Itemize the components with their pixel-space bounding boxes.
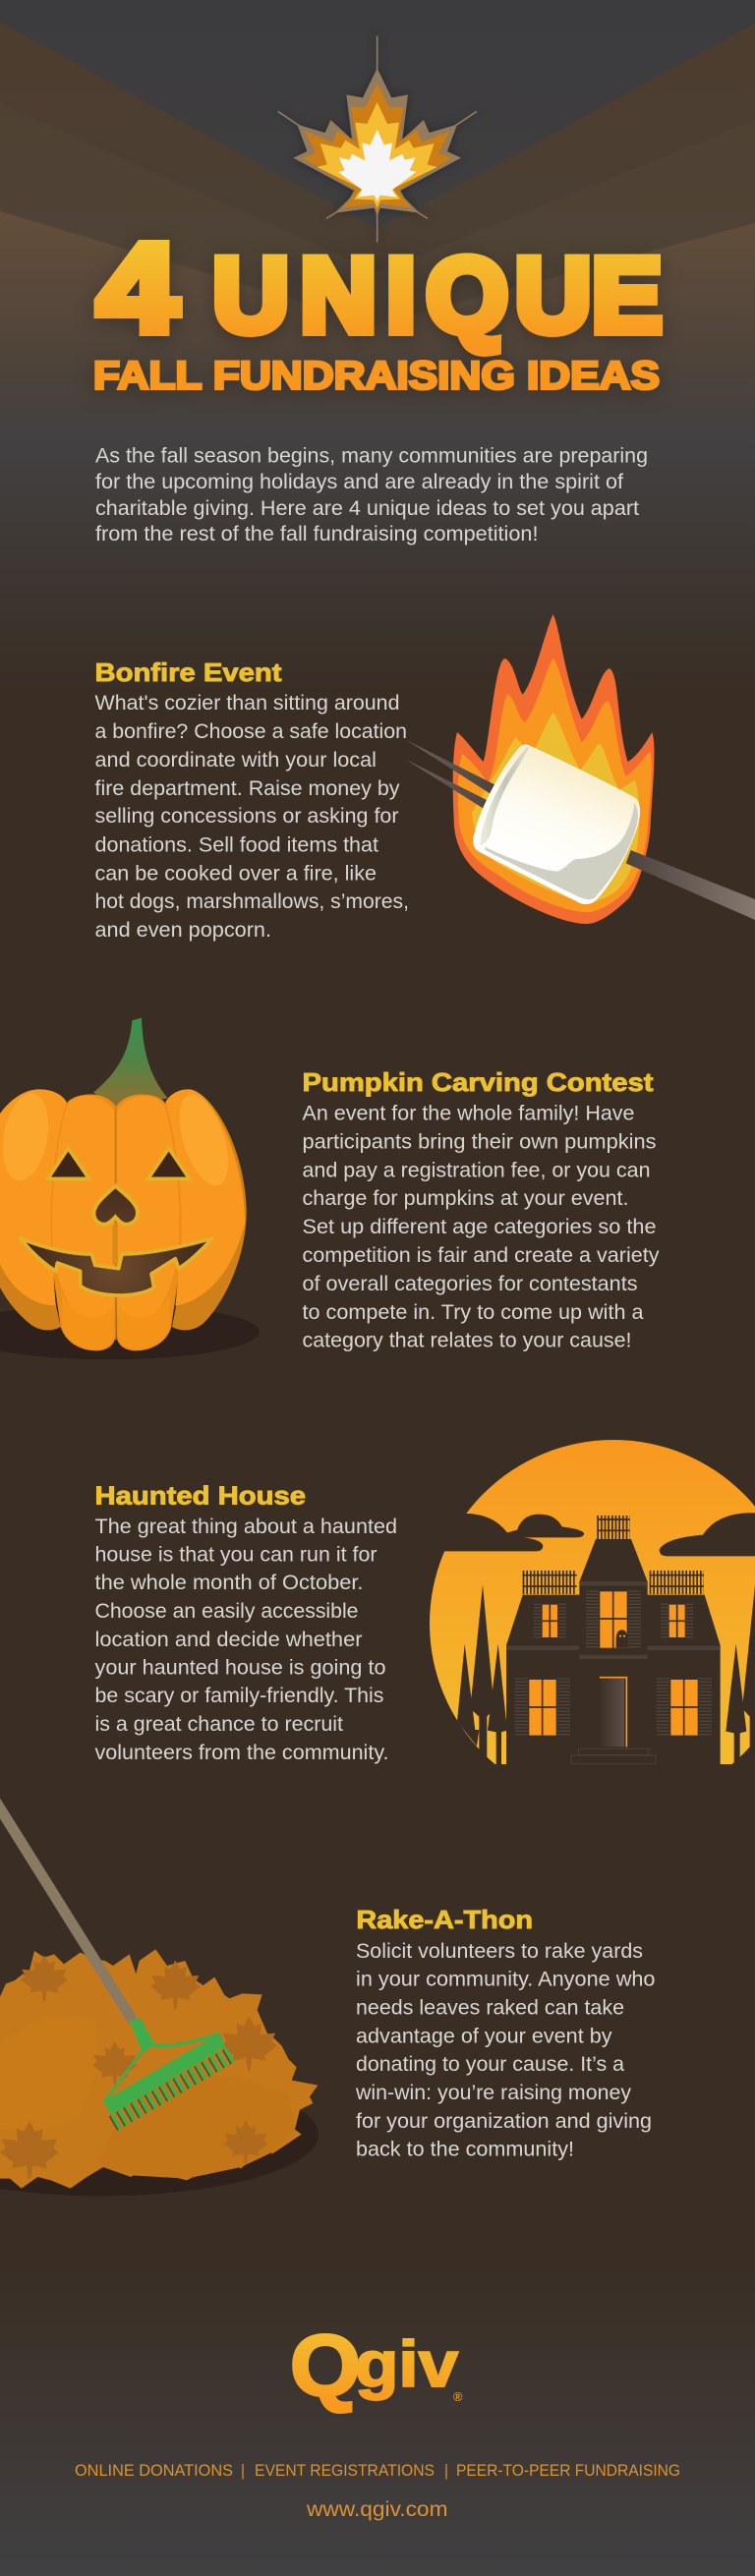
title: 4 (97, 218, 178, 359)
text: rake-a-thon: Solicit volunteers to rake yards (356, 1940, 643, 1963)
heading: rake-a-thon: Rake-A-Thon (356, 1905, 533, 1934)
title: FALL FUNDRAISING IDEAS (93, 354, 660, 397)
icon: leaf pile with rake (0, 1801, 319, 2196)
text: bonfire event: and even popcorn. (94, 919, 271, 942)
logo: Qgiv: giv (355, 2327, 458, 2400)
logo: Qgiv (290, 2317, 463, 2414)
intro text: charitable giving. Here are 4 unique ideas to set you apart (95, 496, 639, 520)
text: bonfire event: and coordinate with your local (94, 749, 377, 772)
footer services line: ONLINE DONATIONS (75, 2461, 233, 2480)
text: haunted house: Choose an easily accessible (94, 1600, 358, 1623)
intro text: for the upcoming holidays and are already in the spirit of (95, 470, 623, 493)
text: bonfire event: What's cozier than sitting around (94, 692, 399, 715)
heading: bonfire event: Bonfire Event (94, 658, 282, 687)
text: haunted house (94, 1516, 397, 1764)
text: rake-a-thon: in your community. Anyone who (356, 1968, 655, 1991)
title: UNIQUE (212, 236, 662, 354)
text: rake-a-thon: donating to your cause. It’s a (356, 2053, 624, 2076)
header light rays (0, 22, 755, 432)
text: pumpkin carving contest: charge for pumpkins at your event. (303, 1187, 629, 1210)
text: bonfire event: selling concessions or asking for (94, 805, 399, 828)
text: pumpkin carving contest: competition is fair and create a variety (303, 1244, 660, 1267)
text: bonfire event (94, 692, 409, 942)
text: haunted house: be scary or family-friendly. This (94, 1685, 383, 1707)
text: pumpkin carving contest: Set up different age categories so the (303, 1216, 657, 1238)
logo: Qgiv: ® (453, 2389, 463, 2404)
icon: haunted house against moon (430, 1440, 755, 1764)
footer services line (75, 2461, 680, 2480)
footer services line: PEER-TO-PEER FUNDRAISING (456, 2461, 680, 2480)
text: pumpkin carving contest: An event for the whole family! Have (303, 1102, 635, 1124)
text: pumpkin carving contest: to compete in. Try to come up with a (303, 1301, 644, 1324)
footer services line: | (241, 2461, 245, 2480)
heading: pumpkin carving contest: Pumpkin Carving Contest (303, 1067, 654, 1097)
icon: marshmallow over flame (406, 614, 755, 924)
panel: rake-a-thon (0, 1801, 655, 2196)
icon: jack-o-lantern (0, 1018, 260, 1359)
text: haunted house: volunteers from the community. (94, 1742, 389, 1764)
text: rake-a-thon (355, 1940, 655, 2160)
intro text (95, 444, 648, 545)
text: haunted house: is a great chance to recruit (94, 1713, 343, 1736)
text: rake-a-thon: for your organization and giving (356, 2110, 652, 2133)
heading: haunted house: Haunted House (94, 1481, 306, 1511)
icon: maple leaf (278, 36, 477, 243)
footer services line: EVENT REGISTRATIONS (255, 2461, 435, 2480)
footer website: www.qgiv.com (306, 2498, 448, 2521)
title (93, 218, 662, 397)
text: rake-a-thon: win-win: you’re raising money (355, 2082, 631, 2104)
logo: Qgiv: Q (290, 2317, 361, 2414)
text: bonfire event: a bonfire? Choose a safe location (94, 720, 407, 743)
text: pumpkin carving contest: of overall categories for contestants (303, 1273, 637, 1295)
text: rake-a-thon: needs leaves raked can take (356, 1996, 624, 2019)
panel: pumpkin carving contest (0, 1018, 660, 1359)
text: pumpkin carving contest: category that relates to your cause! (303, 1329, 631, 1352)
text: bonfire event: donations. Sell food items that (94, 833, 378, 857)
text: bonfire event: can be cooked over a fire, like (94, 863, 377, 885)
panel: haunted house (94, 1440, 755, 1764)
text: pumpkin carving contest: and pay a registration fee, or you can (303, 1160, 651, 1181)
panel: bonfire event (94, 614, 755, 942)
footer services line: | (444, 2461, 448, 2480)
intro text: As the fall season begins, many communities are preparing (95, 444, 648, 468)
text: haunted house: location and decide whether (94, 1629, 363, 1651)
text: bonfire event: fire department. Raise money by (94, 777, 400, 800)
text: haunted house: your haunted house is going to (94, 1657, 385, 1680)
text: pumpkin carving contest (303, 1102, 660, 1352)
text: bonfire event: hot dogs, marshmallows, s’mores, (94, 890, 409, 913)
text: rake-a-thon: back to the community! (356, 2138, 574, 2160)
intro text: from the rest of the fall fundraising competition! (95, 522, 539, 545)
text: pumpkin carving contest: participants bring their own pumpkins (303, 1130, 657, 1154)
text: haunted house: the whole month of October. (94, 1572, 364, 1594)
text: rake-a-thon: advantage of your event by (356, 2025, 612, 2047)
text: haunted house: house is that you can run it for (94, 1544, 378, 1567)
text: haunted house: The great thing about a haunted (94, 1516, 397, 1538)
